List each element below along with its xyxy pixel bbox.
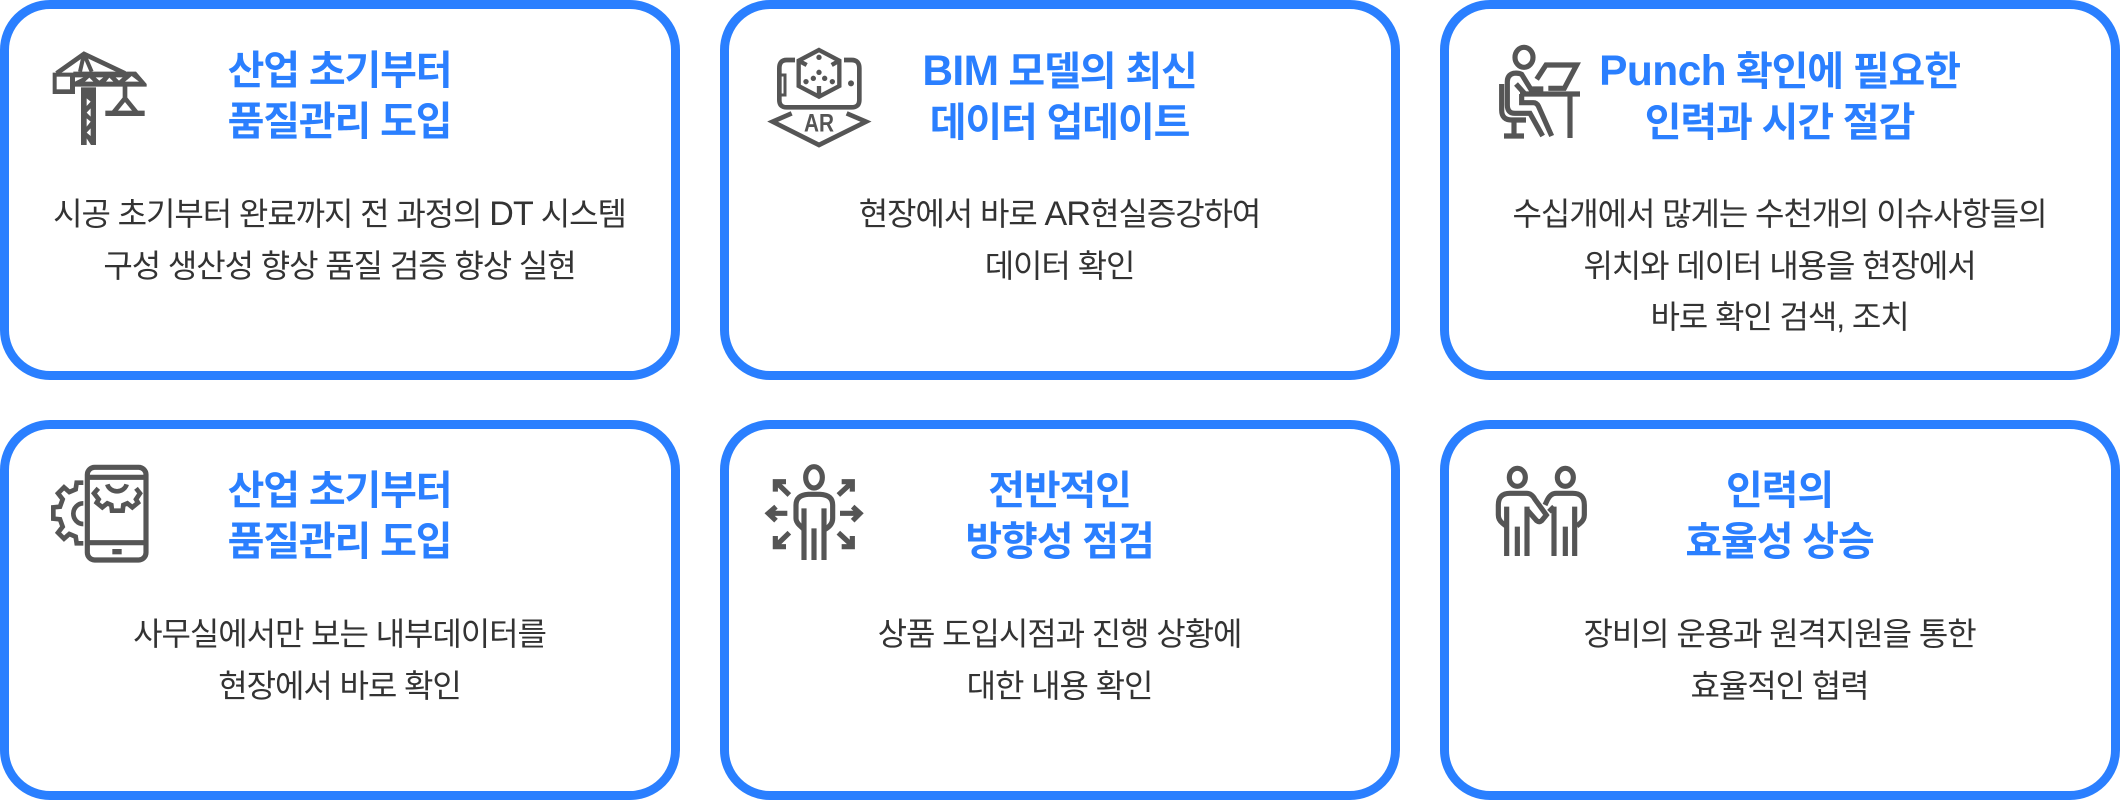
- icon: two people shaking hands: [1496, 466, 1587, 556]
- text block: [133, 616, 546, 704]
- text block: 장비의 운용과 원격지원을 통한: [1583, 616, 1976, 652]
- heading: Punch 확인에 필요한: [1599, 48, 1960, 94]
- text block: [878, 616, 1241, 704]
- text block: 사무실에서만 보는 내부데이터를: [133, 616, 546, 652]
- panel: BIM model update: [720, 0, 1400, 380]
- heading: [1599, 48, 1960, 145]
- heading: [965, 468, 1154, 564]
- text block: 구성 생산성 향상 품질 검증 향상 실현: [103, 248, 576, 284]
- text block: 효율적인 협력: [1690, 668, 1868, 704]
- heading: 품질관리 도입: [228, 520, 451, 564]
- text block: 대한 내용 확인: [967, 668, 1152, 704]
- text block: 상품 도입시점과 진행 상황에: [878, 616, 1241, 652]
- text block: 수십개에서 많게는 수천개의 이슈사항들의: [1513, 196, 2046, 232]
- heading: [922, 48, 1197, 145]
- text block: [859, 195, 1260, 284]
- heading: 방향성 점검: [965, 520, 1154, 564]
- text block: 현장에서 바로 AR현실증강하여: [859, 195, 1260, 233]
- text block: [1583, 616, 1976, 704]
- text block: 데이터 확인: [985, 248, 1134, 284]
- text block: 현장에서 바로 확인: [218, 668, 461, 704]
- heading: 산업 초기부터: [228, 468, 451, 512]
- heading: 인력의: [1726, 468, 1833, 512]
- text block: 위치와 데이터 내용을 현장에서: [1583, 248, 1976, 284]
- heading: BIM 모델의 최신: [922, 48, 1197, 94]
- text block: [1513, 196, 2046, 335]
- panel: office data on site: [0, 420, 680, 800]
- heading: [1685, 468, 1874, 564]
- icon: person with arrows: [764, 464, 864, 560]
- heading: 효율성 상승: [1685, 520, 1874, 564]
- panel: workforce efficiency: [1440, 420, 2120, 800]
- text block: 바로 확인 검색, 조치: [1650, 299, 1909, 335]
- heading: [228, 48, 451, 144]
- panel: early quality management: [0, 0, 680, 380]
- icon: AR phone with cube: [767, 48, 872, 148]
- heading: 산업 초기부터: [228, 48, 451, 92]
- text block: 시공 초기부터 완료까지 전 과정의 DT 시스템: [53, 195, 626, 233]
- heading: 데이터 업데이트: [930, 101, 1189, 145]
- heading: 전반적인: [988, 468, 1131, 512]
- icon: person at desk: [1499, 44, 1581, 139]
- heading: 인력과 시간 절감: [1645, 101, 1914, 145]
- panel: overall direction check: [720, 420, 1400, 800]
- icon: tower crane: [52, 51, 147, 145]
- text block: [53, 195, 626, 284]
- panel: punch check: [1440, 0, 2120, 380]
- icon: phone with gear: [51, 464, 149, 563]
- heading: 품질관리 도입: [228, 100, 451, 144]
- heading: [228, 468, 451, 564]
- icon: AR phone with cube: AR: [804, 109, 834, 137]
